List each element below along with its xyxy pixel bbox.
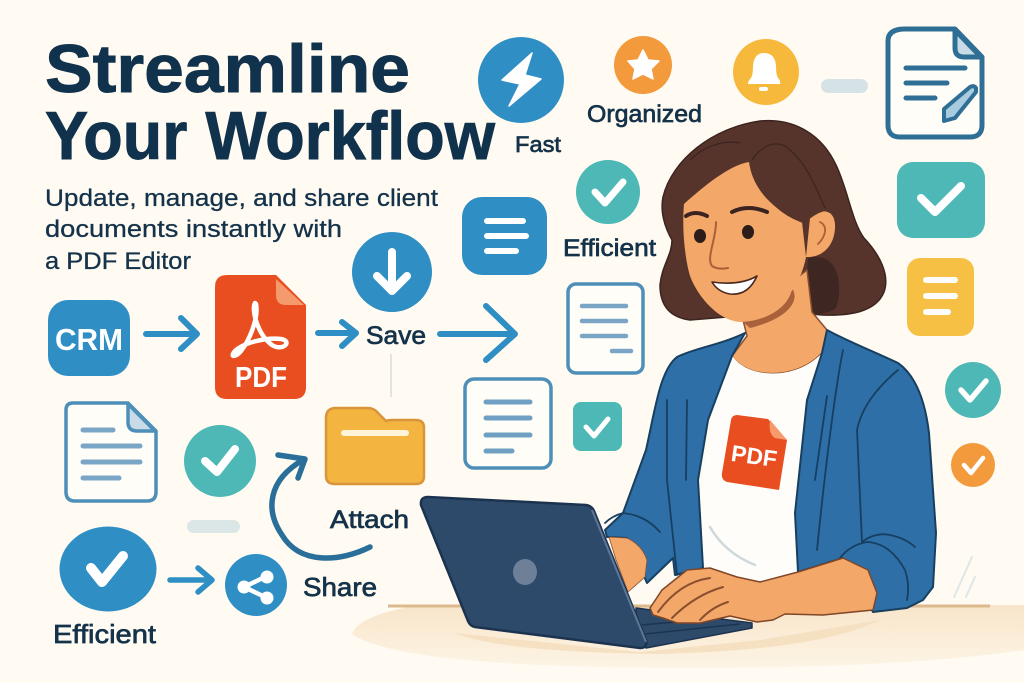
neck shadow bbox=[743, 288, 795, 328]
icon: document with fold bbox=[66, 403, 156, 501]
hair back bbox=[660, 121, 886, 320]
subtitle bbox=[45, 185, 438, 275]
label: efficient upper: Efficient bbox=[563, 235, 656, 262]
label: share: Share bbox=[303, 572, 377, 602]
icon: CRM tile: CRM bbox=[55, 322, 123, 357]
icon: bell bbox=[733, 39, 799, 105]
keyboard base bbox=[636, 608, 752, 648]
icon: document with pen bbox=[888, 29, 982, 137]
right forearm and hand bbox=[650, 558, 877, 623]
subtitle: documents instantly with bbox=[45, 216, 342, 243]
arrow: PDF to save bbox=[318, 322, 356, 346]
decorative pill top bbox=[821, 79, 868, 93]
eyes bbox=[694, 229, 706, 243]
icon: yellow list tile bbox=[907, 258, 974, 336]
icon: teal check left bbox=[184, 425, 256, 497]
decorative pill lower bbox=[187, 520, 240, 533]
label: fast: Fast bbox=[515, 132, 561, 157]
icon: document list right bbox=[568, 284, 643, 373]
arrow: save onward bbox=[440, 306, 515, 360]
icon: share bbox=[225, 554, 287, 616]
shirt fold lines bbox=[710, 527, 755, 565]
icon: efficient check large bbox=[60, 526, 156, 612]
cardigan left bbox=[605, 333, 745, 583]
title: Your Workflow bbox=[45, 98, 496, 174]
icon: PDF document: PDF bbox=[235, 362, 287, 394]
hair fringe bbox=[752, 150, 830, 223]
shirt PDF badge: PDF bbox=[730, 440, 779, 472]
cardigan right bbox=[795, 330, 936, 612]
label: attach: Attach bbox=[330, 506, 409, 534]
icon: orange check bbox=[951, 443, 995, 487]
nose bbox=[710, 222, 728, 269]
cardigan detail lines bbox=[605, 350, 915, 600]
icon: folder bbox=[326, 408, 424, 484]
icon: blue list tile bbox=[462, 197, 547, 275]
icon: CRM tile bbox=[48, 300, 130, 376]
label: save: Save bbox=[366, 322, 426, 350]
icon: teal check small bbox=[945, 362, 1001, 418]
subtitle: Update, manage, and share client bbox=[45, 185, 438, 212]
shirt PDF badge bbox=[722, 415, 787, 490]
motion lines bbox=[954, 557, 975, 597]
arrow: CRM to PDF bbox=[146, 318, 197, 349]
neck bbox=[732, 270, 827, 374]
hair strands bbox=[690, 142, 825, 208]
smile bbox=[712, 276, 757, 294]
icon: document list center bbox=[465, 379, 551, 468]
icon: star bbox=[614, 36, 672, 94]
left hand bbox=[609, 537, 647, 592]
arrow: curved to folder bbox=[272, 455, 370, 558]
arrow: efficient to share bbox=[170, 568, 212, 592]
hair shadow bbox=[805, 257, 839, 314]
icon: fast lightning bbox=[478, 37, 564, 123]
ear bbox=[806, 211, 835, 257]
icon: teal check tile bbox=[897, 162, 985, 238]
lid highlight bbox=[592, 510, 646, 642]
title bbox=[45, 31, 496, 174]
subtitle: a PDF Editor bbox=[45, 248, 191, 275]
face bbox=[683, 162, 806, 322]
connector line bbox=[390, 354, 392, 397]
icon: small teal check tile bbox=[573, 402, 622, 451]
icon: teal check circle efficient bbox=[576, 160, 640, 224]
laptop bbox=[421, 497, 752, 648]
eyebrows bbox=[686, 208, 767, 216]
lid bbox=[421, 497, 646, 648]
icon: PDF document bbox=[215, 275, 306, 399]
keyboard keys bbox=[642, 618, 740, 634]
label: organized: Organized bbox=[587, 101, 702, 128]
label: efficient lower: Efficient bbox=[53, 619, 157, 649]
person bbox=[605, 121, 936, 612]
desk bbox=[352, 605, 1024, 668]
logo bbox=[513, 559, 537, 585]
title: Streamline bbox=[45, 31, 410, 107]
icon: save download bbox=[352, 232, 432, 312]
t-shirt bbox=[700, 353, 822, 585]
